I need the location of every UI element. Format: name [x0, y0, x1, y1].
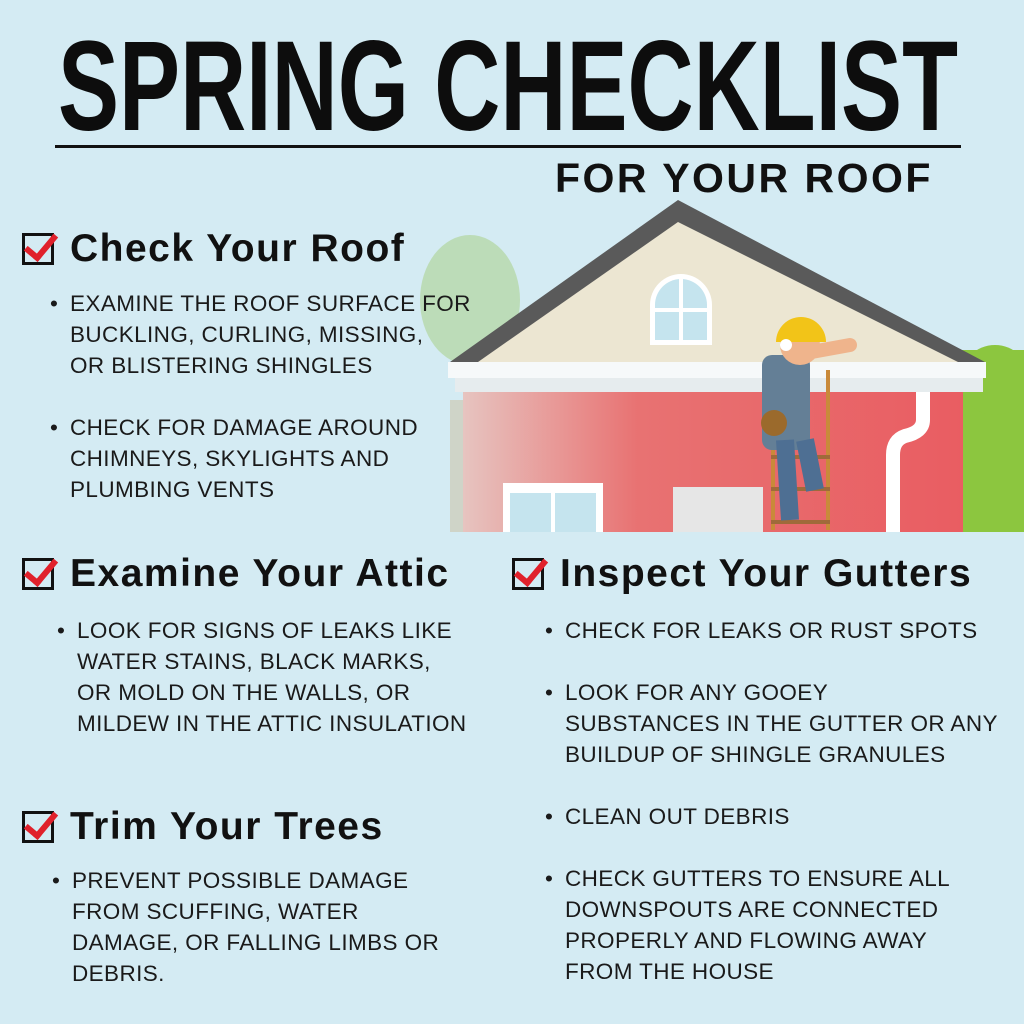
scene: house illustration	[420, 200, 1024, 532]
bullets: roof: PLUMBING VENTS	[70, 477, 274, 502]
bullets: gutters: CHECK GUTTERS TO ENSURE ALL	[565, 866, 950, 891]
heading: examine your attic: Examine Your Attic	[70, 552, 450, 595]
bullets: attic: WATER STAINS, BLACK MARKS,	[77, 649, 431, 674]
bullets: trees: FROM SCUFFING, WATER	[72, 899, 359, 924]
bullets: gutters: BUILDUP OF SHINGLE GRANULES	[565, 742, 945, 767]
bullets: roof	[50, 291, 471, 502]
bullets: roof: CHIMNEYS, SKYLIGHTS AND	[70, 446, 389, 471]
bullets: gutters	[546, 618, 998, 984]
bullets: trees: PREVENT POSSIBLE DAMAGE	[72, 868, 408, 893]
bullets: gutters: FROM THE HOUSE	[565, 959, 774, 984]
bullets: attic	[58, 618, 467, 736]
bullets: gutters: CHECK FOR LEAKS OR RUST SPOTS	[565, 618, 978, 643]
bullets: trees: DAMAGE, OR FALLING LIMBS OR	[72, 930, 439, 955]
bullets: gutters: LOOK FOR ANY GOOEY	[565, 680, 828, 705]
bullets: gutters: CLEAN OUT DEBRIS	[565, 804, 790, 829]
bullets: attic: LOOK FOR SIGNS OF LEAKS LIKE	[77, 618, 452, 643]
subtitle: FOR YOUR ROOF	[555, 155, 933, 201]
bullets: roof: CHECK FOR DAMAGE AROUND	[70, 415, 418, 440]
bullets: roof: OR BLISTERING SHINGLES	[70, 353, 373, 378]
bullets: trees	[52, 868, 439, 986]
bullets: attic: OR MOLD ON THE WALLS, OR	[77, 680, 410, 705]
bullets: gutters: PROPERLY AND FLOWING AWAY	[565, 928, 927, 953]
bullets: attic: MILDEW IN THE ATTIC INSULATION	[77, 711, 467, 736]
bullets: roof: EXAMINE THE ROOF SURFACE FOR	[70, 291, 471, 316]
heading: trim your trees: Trim Your Trees	[70, 805, 384, 848]
bullets: roof: BUCKLING, CURLING, MISSING,	[70, 322, 423, 347]
heading: check your roof: Check Your Roof	[70, 227, 405, 270]
bullets: gutters: DOWNSPOUTS ARE CONNECTED	[565, 897, 938, 922]
bullets: trees: DEBRIS.	[72, 961, 165, 986]
bullets: gutters: SUBSTANCES IN THE GUTTER OR ANY	[565, 711, 998, 736]
heading: inspect your gutters: Inspect Your Gutters	[560, 552, 972, 595]
